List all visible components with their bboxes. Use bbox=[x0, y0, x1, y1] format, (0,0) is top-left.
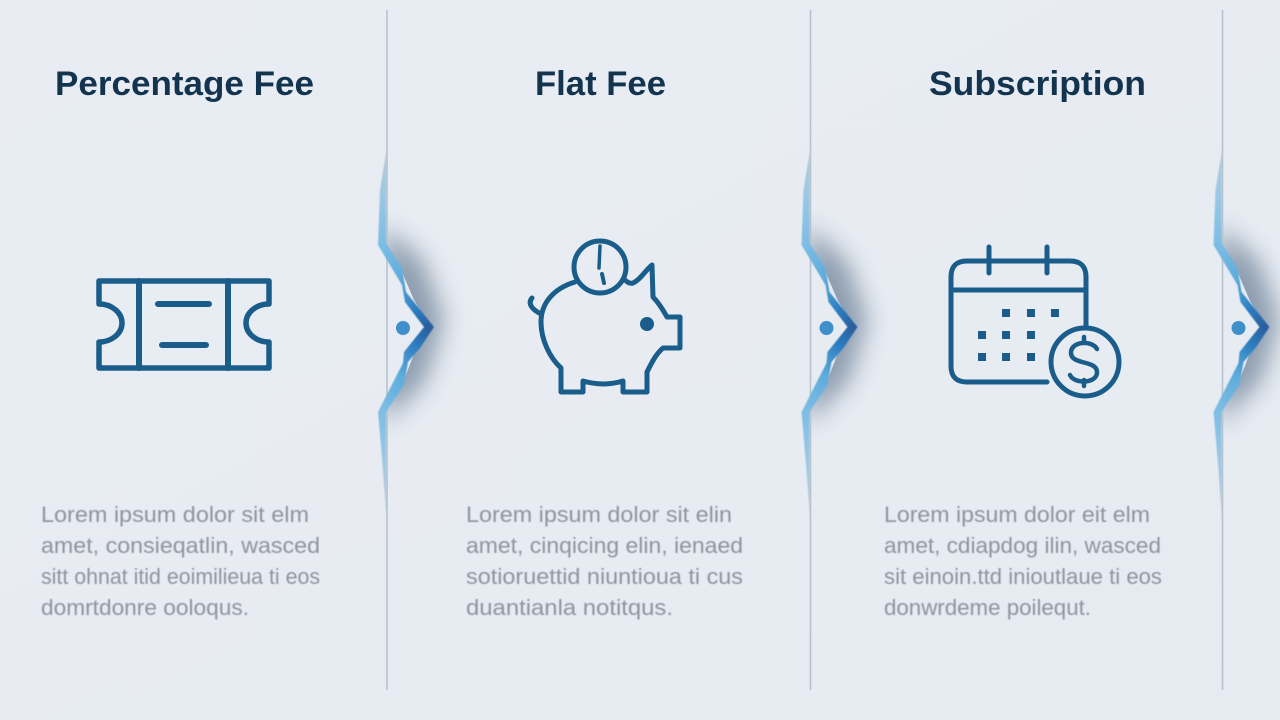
text block: Percentage Fee description: amet, consieqatlin, wasced bbox=[41, 533, 320, 558]
text block: Subscription description: sit einoin.ttd inioutlaue ti eos bbox=[884, 564, 1162, 589]
dot bbox=[396, 321, 410, 335]
text block: Flat Fee description: Lorem ipsum dolor sit elin bbox=[466, 502, 732, 527]
divider 3 with chevron bbox=[1214, 10, 1280, 690]
text block: Percentage Fee description: sitt ohnat itid eoimilieua ti eos bbox=[41, 564, 320, 589]
text block: Flat Fee description bbox=[466, 502, 743, 620]
heading: Percentage Fee: Percentage Fee bbox=[55, 65, 314, 103]
text block: Subscription description: Lorem ipsum dolor eit elm bbox=[884, 502, 1150, 527]
text block: Flat Fee description: duantianla notitqus. bbox=[466, 595, 673, 620]
heading: Flat Fee: Flat Fee bbox=[535, 65, 666, 103]
text block: Percentage Fee description bbox=[41, 502, 320, 620]
text block: Flat Fee description: amet, cinqicing elin, ienaed bbox=[466, 533, 743, 558]
divider 1 with chevron bbox=[378, 10, 444, 690]
heading: Subscription: Subscription bbox=[929, 65, 1146, 103]
text block: Subscription description bbox=[884, 502, 1162, 620]
text block: Subscription description: amet, cdiapdog ilin, wasced bbox=[884, 533, 1161, 558]
calendar dots bbox=[978, 309, 1059, 361]
divider 2 with chevron bbox=[802, 10, 868, 690]
icon: calendar with dollar coin bbox=[951, 247, 1119, 396]
dot bbox=[820, 321, 834, 335]
text block: Flat Fee description: sotioruettid niuntioua ti cus bbox=[466, 564, 743, 589]
icon: ticket bbox=[99, 281, 269, 368]
text block: Percentage Fee description: domrtdonre ooloqus. bbox=[41, 595, 249, 620]
text block: Percentage Fee description: Lorem ipsum dolor sit elm bbox=[41, 502, 309, 527]
icon: piggy bank with coin bbox=[530, 241, 680, 392]
dot bbox=[1232, 321, 1246, 335]
text block: Subscription description: donwrdeme poilequt. bbox=[884, 595, 1091, 620]
